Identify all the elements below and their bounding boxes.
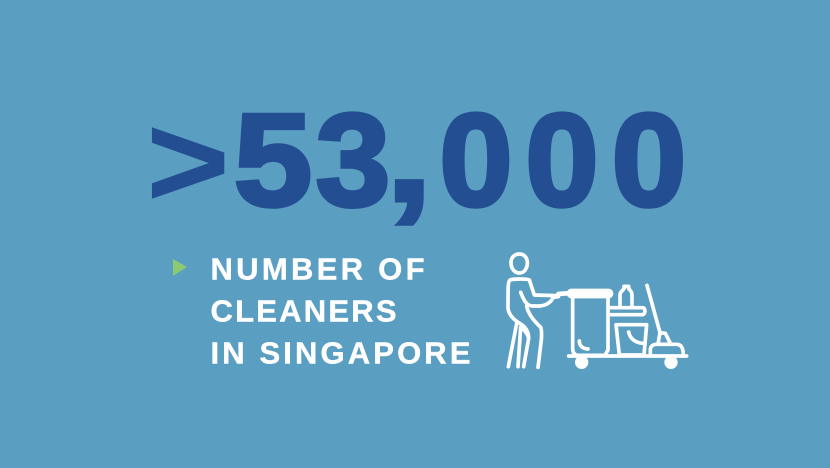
icon part: cleaner figure <box>508 254 558 367</box>
icon: cleaner pushing cart <box>508 254 687 369</box>
description text <box>210 252 470 370</box>
headline number <box>147 66 686 234</box>
headline number: 0 <box>439 86 513 234</box>
icon part: bucket <box>609 308 647 355</box>
headline number: 0 <box>612 87 686 234</box>
icon: green bullet triangle <box>173 259 187 276</box>
icon part: spray bottle <box>620 286 632 305</box>
icon part: mop <box>647 285 683 355</box>
headline number: > <box>147 89 229 234</box>
headline number: 3 <box>316 87 390 234</box>
description text: IN SINGAPORE <box>210 336 470 370</box>
headline number: 0 <box>525 86 599 234</box>
icon part: cart bin <box>558 290 612 355</box>
description text: NUMBER OF <box>210 252 424 286</box>
icon part: cart base and wheels <box>569 356 687 369</box>
headline number: , <box>382 66 436 234</box>
description text: CLEANERS <box>210 294 396 328</box>
headline number: 5 <box>234 86 312 234</box>
